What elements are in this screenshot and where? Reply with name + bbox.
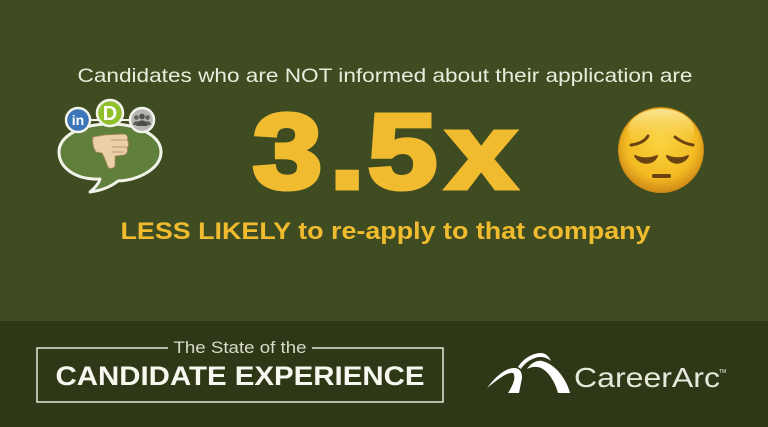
icon: people badge xyxy=(130,108,154,132)
big statistic 3.5x: 3.5x xyxy=(253,93,516,211)
intro sentence: Candidates who are NOT informed about their application are xyxy=(78,65,693,87)
logo trademark: TM xyxy=(719,369,726,375)
icon: pensive face emoji xyxy=(618,108,704,192)
footer band xyxy=(0,321,768,427)
decorative connector behind badges xyxy=(78,119,142,121)
icon: speech bubble with thumbs down and social badges xyxy=(59,100,161,192)
icon: thumbs down xyxy=(93,134,128,168)
footer title line 1: The State of the xyxy=(174,339,306,357)
icon: green D badge: D xyxy=(103,103,117,125)
CareerArc logo xyxy=(487,353,726,393)
subheading: LESS LIKELY to re-apply to that company xyxy=(120,218,651,245)
logo mark: arcs xyxy=(487,368,522,393)
footer title line 2: CANDIDATE EXPERIENCE xyxy=(56,361,424,391)
speech bubble xyxy=(59,124,161,192)
footer title box xyxy=(37,339,443,402)
icon: LinkedIn badge: in xyxy=(72,112,84,128)
logo wordmark: CareerArc xyxy=(574,362,720,393)
